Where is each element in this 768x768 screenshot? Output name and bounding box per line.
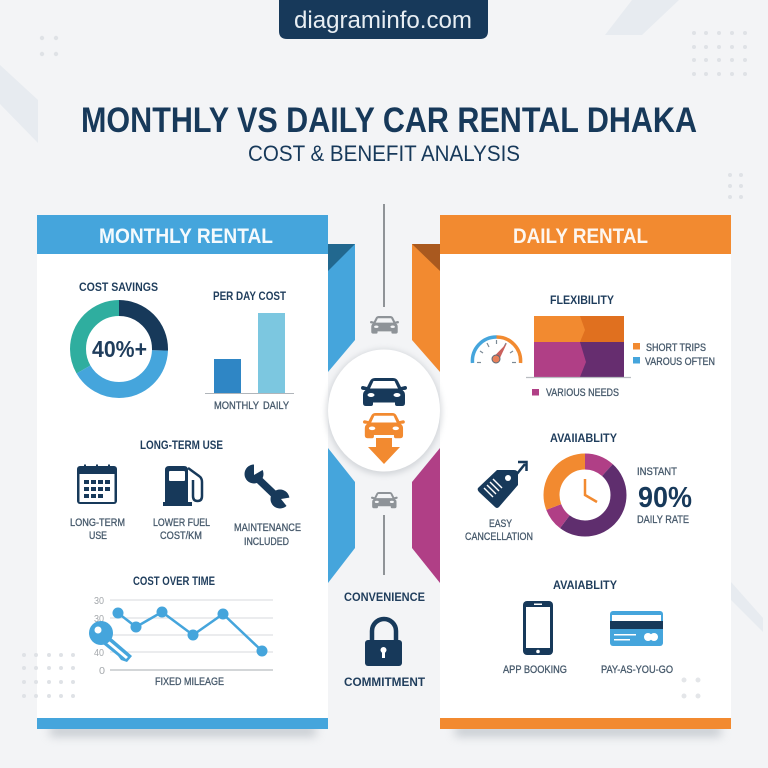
title: MONTHLY VS DAILY CAR RENTAL DHAKA: [81, 101, 697, 140]
cost over time line chart: 0: [99, 665, 105, 677]
per day cost bar chart: DAILY: [263, 400, 290, 412]
icon: credit card: [610, 611, 663, 646]
label: easy cancellation: EASY: [489, 518, 513, 530]
availability clock donut: [552, 462, 618, 528]
stat: 90 percent daily rate: INSTANT: [637, 466, 677, 478]
label: maintenance: INCLUDED: [244, 536, 289, 548]
label: easy cancellation: [465, 518, 533, 543]
site badge: diagraminfo.com: [294, 7, 472, 34]
icon: smartphone: [523, 601, 553, 655]
cost over time line chart: FIXED MILEAGE: [155, 676, 224, 688]
label: maintenance: MAINTENANCE: [234, 522, 301, 534]
cost over time line chart: [89, 574, 273, 688]
label: long-term use: [70, 517, 125, 542]
long-term use heading: LONG-TERM USE: [140, 438, 223, 452]
label: pay as you go: PAY-AS-YOU-GO: [601, 664, 673, 676]
flexibility legend: VARIOUS NEEDS: [546, 387, 619, 399]
icon: padlock: [365, 619, 402, 666]
label: maintenance: [234, 522, 301, 548]
center circle: [326, 349, 442, 475]
flexibility legend: [532, 342, 715, 399]
availability heading: AVAIIABLITY: [550, 431, 617, 445]
flexibility legend: VAROUS OFTEN: [645, 356, 715, 368]
flexibility stacked chart: [526, 316, 631, 378]
dots decoration: [34, 653, 75, 698]
cost savings donut: [78, 280, 160, 390]
cost over time line chart: 40: [94, 647, 104, 659]
stat: 90 percent daily rate: 90%: [638, 482, 692, 514]
icon: orange down arrow: [368, 438, 400, 464]
icon: price tag: [478, 462, 526, 508]
icon: wrench: [244, 462, 293, 509]
cost over time line chart: 30: [94, 595, 104, 607]
cost savings donut: 40%+: [92, 336, 147, 362]
label: app booking: APP BOOKING: [503, 664, 567, 676]
label: long-term use: USE: [89, 530, 107, 542]
icon: small grey car bottom: [371, 492, 398, 508]
icon: key: [89, 621, 132, 662]
cost savings donut: COST SAVINGS: [79, 280, 158, 294]
monthly heading: MONTHLY RENTAL: [99, 225, 273, 248]
stat: 90 percent daily rate: [637, 466, 692, 526]
label: commitment: COMMITMENT: [344, 675, 426, 689]
label: lower fuel: LOWER FUEL: [153, 517, 210, 529]
label: long-term use: LONG-TERM: [70, 517, 125, 529]
dots decoration: [682, 678, 700, 698]
icon: orange car: [363, 413, 405, 438]
per day cost bar chart: PER DAY COST: [213, 289, 287, 303]
orange and magenta side ribbon: [412, 244, 440, 583]
icon: speedometer gauge: [472, 337, 521, 363]
icon: calendar: [77, 464, 117, 504]
icon: small grey car top: [370, 316, 399, 334]
label: convenience: CONVENIENCE: [344, 590, 425, 604]
icon: navy car: [361, 378, 407, 406]
cost over time line chart: 30: [94, 613, 104, 625]
second availability heading: AVAIABLITY: [553, 578, 617, 592]
subtitle: COST & BENEFIT ANALYSIS: [248, 141, 520, 166]
center connector line: [383, 204, 385, 575]
per day cost bar chart: [205, 289, 294, 412]
per day cost bar chart: MONTHLY: [214, 400, 260, 412]
cost over time line chart: COST OVER TIME: [133, 574, 215, 588]
label: lower fuel: COST/KM: [160, 530, 202, 542]
label: lower fuel: [153, 517, 210, 542]
panel: daily rental: [440, 215, 731, 736]
panel: monthly rental: [34, 215, 328, 736]
daily heading: DAILY RENTAL: [513, 225, 648, 248]
flexibility legend: SHORT TRIPS: [646, 342, 706, 354]
blue side ribbon: [328, 244, 355, 583]
site badge: [279, 0, 488, 39]
icon: fuel pump: [163, 466, 202, 506]
flexibility heading: FLEXIBILITY: [550, 293, 614, 307]
label: easy cancellation: CANCELLATION: [465, 531, 533, 543]
stat: 90 percent daily rate: DAILY RATE: [637, 514, 689, 526]
